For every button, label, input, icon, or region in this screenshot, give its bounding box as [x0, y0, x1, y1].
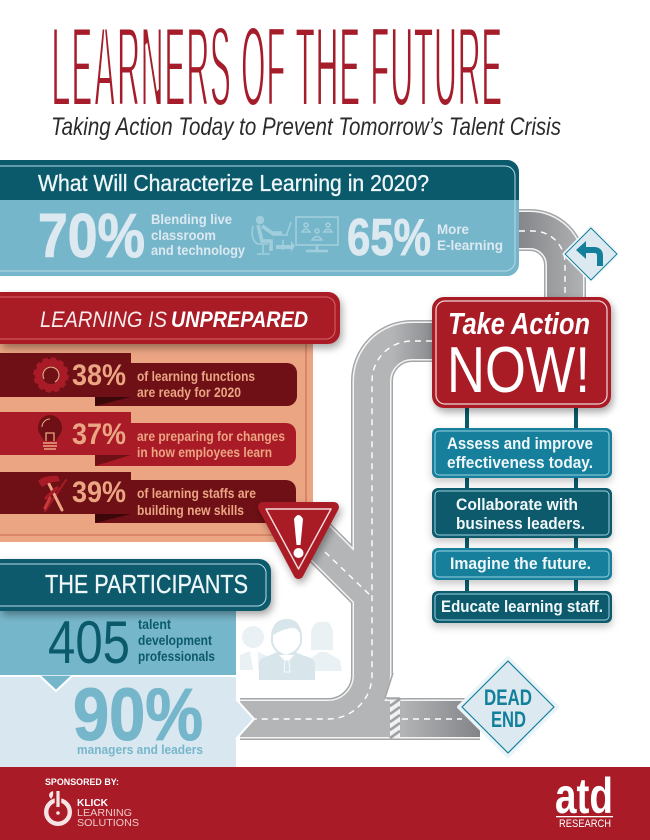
footer	[0, 767, 650, 840]
now text: NOW!	[447, 333, 590, 406]
header: the participants: THE PARTICIPANTS	[45, 569, 248, 599]
text: talent development professionals: development	[138, 633, 212, 648]
atd research logo: atd	[555, 768, 613, 824]
stat: 65%: 65%	[347, 209, 431, 267]
text: blending: and technology	[151, 243, 245, 258]
heading: What Will Characterize Learning in 2020?	[38, 170, 429, 196]
take action text: Take Action	[448, 306, 590, 341]
text: more e-learning: E-learning	[437, 238, 503, 253]
sign: educate	[432, 591, 612, 623]
sign: assess	[432, 428, 612, 478]
klick logo: SOLUTIONS	[77, 818, 139, 829]
sign: imagine	[432, 548, 612, 580]
header: learning is unprepared: UNPREPARED	[171, 307, 308, 332]
header: learning is unprepared	[0, 292, 340, 344]
klick logo: KLICK	[77, 798, 109, 809]
row: 39%: building new skills	[137, 503, 244, 518]
panel: what will characterize learning	[0, 160, 519, 276]
roads	[240, 230, 565, 738]
row: 37%	[0, 412, 296, 466]
stat: 90%: 90%	[73, 673, 203, 756]
sign posts	[465, 405, 578, 605]
text: blending: Blending live	[151, 212, 232, 227]
sign: imagine: Imagine the future.	[450, 555, 591, 573]
icon: turn arrow sign	[564, 227, 618, 281]
row: 38%: of learning functions	[137, 369, 255, 384]
klick logo: LEARNING	[77, 808, 132, 819]
atd research logo: RESEARCH	[559, 818, 611, 830]
panel: learning is unprepared	[0, 340, 313, 542]
text: talent development professionals: professionals	[138, 649, 215, 664]
sign: collaborate	[432, 488, 612, 538]
icon: light bulb	[38, 415, 62, 449]
icon: dead end sign	[459, 658, 557, 756]
header: learning is unprepared: LEARNING IS	[40, 307, 167, 332]
row: 37%: 37%	[72, 418, 126, 451]
sign: collaborate: business leaders.	[456, 515, 585, 533]
sign: assess: Assess and improve	[447, 435, 593, 453]
sign: educate: Educate learning staff.	[441, 598, 603, 616]
title: LEARNERS OF THE FUTURE	[51, 0, 503, 134]
icon: hammer and screwdriver	[38, 476, 66, 511]
text: talent development professionals	[138, 617, 215, 664]
row: 38%	[0, 353, 297, 406]
sponsored by: SPONSORED BY:	[45, 777, 119, 787]
stat: 70%: 70%	[38, 202, 145, 271]
row: 39%: of learning staffs are	[137, 486, 256, 501]
panel: participants stats	[0, 609, 254, 767]
stat: 405: 405	[48, 609, 130, 676]
row: 38%: 38%	[72, 359, 126, 392]
row: 39%	[0, 472, 296, 523]
text: more e-learning	[437, 222, 503, 253]
row: 37%: are preparing for changes	[137, 429, 285, 444]
klick logo	[46, 791, 139, 829]
row: 39%: 39%	[72, 476, 126, 509]
text: blending: classroom	[151, 228, 216, 243]
road barrier	[390, 699, 400, 738]
text: blending	[151, 212, 245, 258]
header: the participants	[0, 559, 271, 611]
text: more e-learning: More	[437, 222, 469, 237]
icon: dead end sign: END	[491, 707, 526, 732]
sign: collaborate: Collaborate with	[456, 496, 578, 514]
row: 37%: in how employees learn	[137, 445, 272, 460]
sign: assess: effectiveness today.	[447, 454, 593, 472]
icon: people	[240, 619, 342, 680]
icon: dead end sign: DEAD	[484, 685, 532, 710]
icon: person at desk to online class	[252, 217, 338, 254]
icon: gear	[36, 360, 66, 390]
icon: warning triangle	[263, 507, 334, 574]
text: managers and leaders: managers and leaders	[77, 743, 203, 757]
row: 38%: are ready for 2020	[137, 385, 241, 400]
text: talent development professionals: talent	[138, 617, 171, 632]
sign: take action now	[432, 297, 611, 408]
